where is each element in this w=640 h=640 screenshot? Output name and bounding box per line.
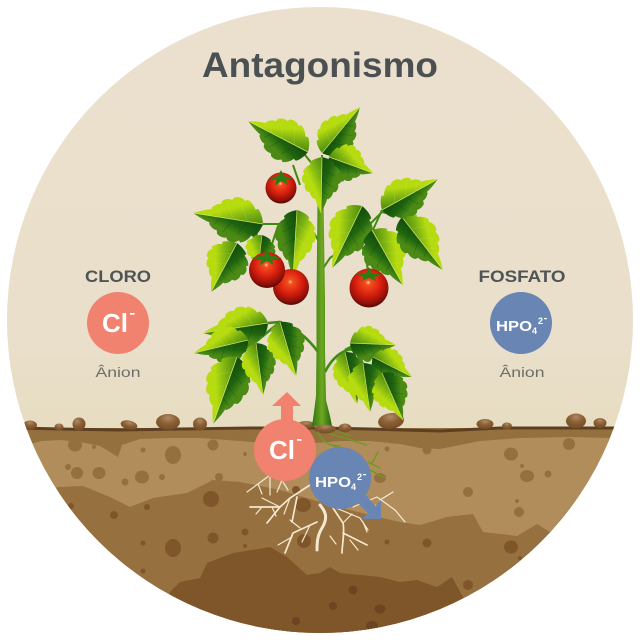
heading: cloro: CLORO (85, 267, 151, 286)
icon: chloride ion: Cl (102, 308, 128, 338)
icon: phosphate ion in soil: HPO (315, 474, 351, 491)
label: anion: Ânion (500, 364, 544, 380)
soil deep layer (169, 547, 464, 633)
icon: phosphate ion (490, 292, 552, 354)
label: anion: Ânion (96, 364, 140, 380)
icon: chloride ion in soil: Cl (269, 435, 295, 465)
title: Antagonismo (202, 46, 438, 85)
young green roots (318, 432, 385, 478)
icon: chloride ion in soil (254, 419, 316, 481)
icon: phosphate ion: 2 (538, 316, 543, 326)
soil light layer (32, 437, 610, 633)
soil top layer (26, 428, 614, 633)
pale branching roots (250, 485, 367, 553)
ground line (20, 428, 640, 431)
heading: fosfato: FOSFATO (478, 267, 566, 286)
soil cross-section (24, 412, 614, 633)
tomato left (249, 249, 285, 288)
tomato top (266, 170, 296, 204)
stem and branches (237, 155, 402, 426)
icon: phosphate ion in soil (309, 447, 371, 509)
plant (189, 95, 459, 434)
tomato right (350, 267, 388, 308)
panel: cloro (85, 267, 151, 380)
icon: phosphate ion in soil: 2 (357, 472, 362, 482)
soil blobs deep layer (292, 586, 386, 630)
panel: fosfato (478, 267, 566, 380)
front stones at stem base (314, 424, 336, 434)
soil blobs light layer (65, 438, 575, 517)
arrow: chloride moving up (272, 392, 301, 425)
pale taproot (317, 505, 326, 550)
arrow: phosphate moving down (358, 495, 381, 519)
soil blobs middle layer (68, 486, 522, 590)
stones (23, 411, 606, 433)
roots (247, 432, 405, 553)
icon: phosphate ion: 4 (532, 326, 537, 336)
tomato back (273, 269, 309, 305)
icon: phosphate ion: HPO (496, 318, 532, 335)
icon: phosphate ion in soil: 4 (351, 482, 356, 492)
soil middle layer (56, 480, 550, 633)
leaves (189, 95, 459, 431)
